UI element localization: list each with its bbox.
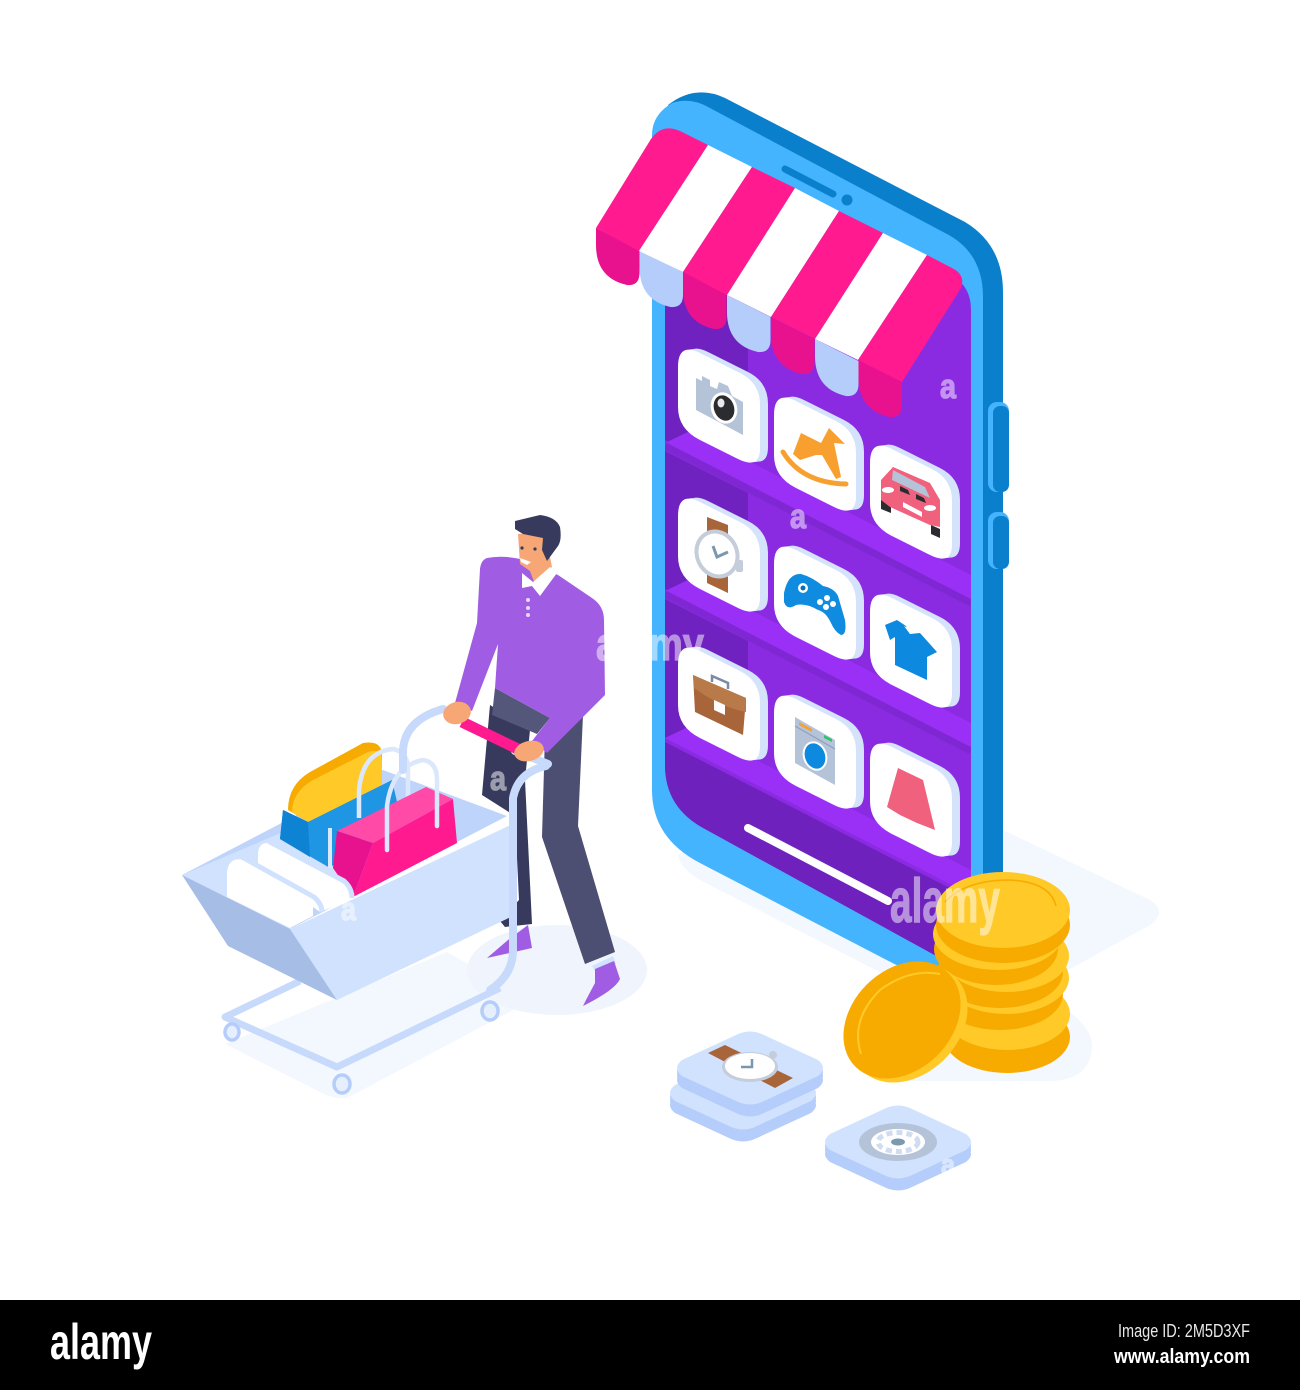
watermark: alamy: a <box>941 1149 955 1180</box>
front leg <box>542 715 615 964</box>
phone home bar <box>748 828 888 901</box>
phone speaker <box>785 169 833 194</box>
app tile: car <box>870 445 960 559</box>
neck and face <box>518 532 552 582</box>
app tile: wristwatch <box>678 498 768 612</box>
phone front body <box>652 101 983 1010</box>
app tile: game controller <box>774 546 864 660</box>
gold coin stack <box>933 872 1070 1073</box>
cart lower frame <box>225 981 500 1093</box>
watermark: alamy: a <box>341 891 356 927</box>
watermark: alamy: a <box>790 498 807 536</box>
man <box>455 515 620 1006</box>
awning <box>596 128 962 417</box>
smile <box>520 558 531 565</box>
watermark: alamy: a <box>940 368 957 406</box>
bag: yellow <box>288 742 382 822</box>
flat tile with dial <box>825 1106 971 1190</box>
app tile: washing machine <box>774 695 864 809</box>
bag handle: back <box>359 749 408 818</box>
basket side panel <box>182 875 337 1000</box>
awning stripes <box>596 128 962 382</box>
blue bag handle stub <box>328 828 332 868</box>
app tile: skirt <box>870 743 960 857</box>
phone camera <box>842 194 852 206</box>
back leg <box>482 705 532 927</box>
bag: blue <box>280 780 398 868</box>
smartphone <box>652 92 1009 1012</box>
basket interior <box>182 770 507 929</box>
footer logo: alamy <box>50 1314 152 1370</box>
shopping cart basket <box>182 742 517 1000</box>
pink handle bar <box>462 722 520 750</box>
basket rim <box>182 832 340 929</box>
stacked flat tile with watch <box>670 1032 823 1142</box>
back shoe <box>487 925 532 958</box>
hair <box>515 515 561 561</box>
bag: pink <box>333 787 457 897</box>
sweater <box>455 557 605 753</box>
leaning gold coin <box>820 938 991 1106</box>
folded clothes <box>227 841 352 928</box>
eyes <box>520 546 537 551</box>
image id: Image ID: 2M5D3XF <box>1118 1321 1250 1341</box>
basket front panel <box>290 822 517 1000</box>
hands <box>441 699 546 765</box>
front shoe <box>583 961 620 1006</box>
front sock <box>592 956 616 973</box>
cart wheels <box>225 1002 498 1093</box>
app tile: t-shirt <box>870 594 960 708</box>
app tile: briefcase <box>678 647 768 761</box>
website: www.alamy.com <box>1113 1346 1250 1368</box>
app tile: rocking horse <box>774 397 864 511</box>
watermark: alamy: alamy <box>890 867 1000 936</box>
phone side buttons <box>988 402 1009 569</box>
phone dark edge <box>668 92 1003 1012</box>
awning scallops <box>596 228 902 417</box>
phone screen <box>665 154 971 956</box>
watermark: alamy <box>341 368 1000 1180</box>
watermark: alamy: alamy <box>596 618 704 670</box>
collar <box>522 567 557 596</box>
bag handle: front <box>387 760 437 850</box>
waist <box>492 688 550 734</box>
footer bar <box>0 1300 1300 1390</box>
sweater buttons <box>526 598 530 617</box>
watermark: alamy: a <box>490 760 507 798</box>
cart handle frame <box>403 709 548 990</box>
floor shadows <box>225 830 1159 1098</box>
app tile: camera <box>678 349 768 463</box>
